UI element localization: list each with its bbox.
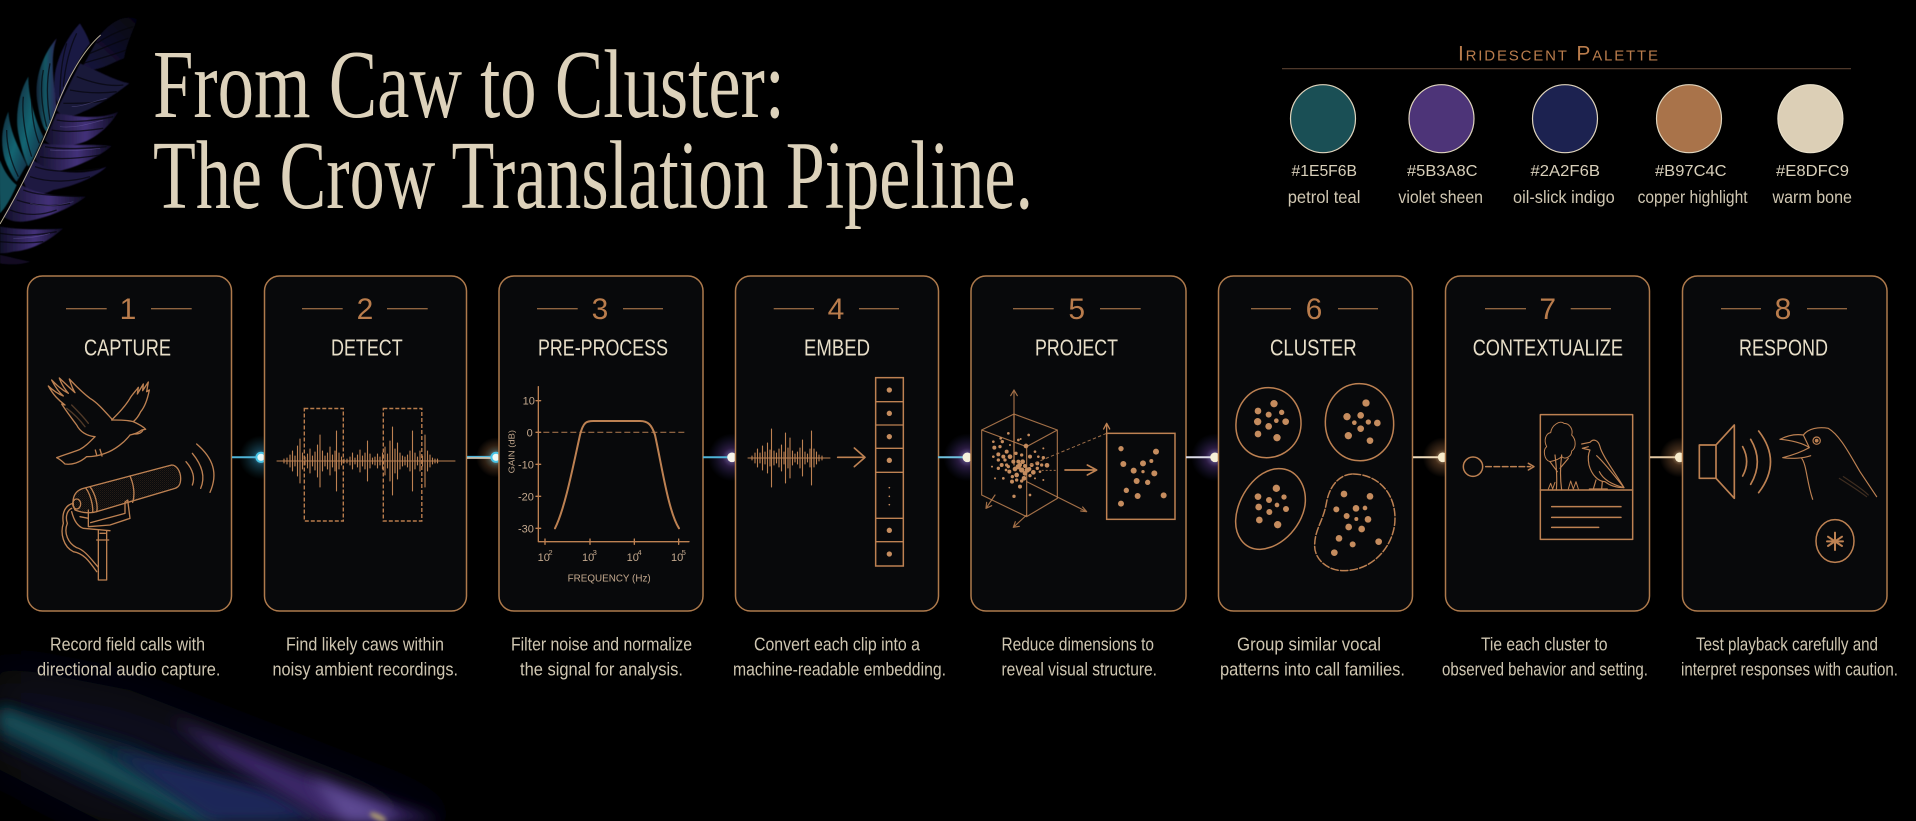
swatch: copper highlight: #B97C4C — [1655, 163, 1727, 180]
caption: capture: directional audio capture. — [37, 660, 220, 680]
arrow: connector 1 to 2 — [232, 435, 283, 479]
swatch: petrol teal: #1E5F6B — [1292, 163, 1357, 180]
swatch: violet sheen: #5B3A8C — [1407, 163, 1478, 180]
title: The Crow Translation Pipeline. — [153, 122, 1033, 230]
arrow: connector 6 to 7 — [1413, 437, 1463, 477]
axis labels — [507, 396, 686, 585]
swatch: warm bone — [1772, 85, 1852, 207]
caption: contextualize: Tie each cluster to — [1481, 635, 1608, 655]
caption: capture — [37, 635, 220, 680]
icon: flying crow — [48, 378, 149, 464]
swatch: violet sheen: violet sheen — [1398, 187, 1483, 207]
step number: 4 — [828, 293, 844, 326]
panel: step 4 embed — [736, 276, 938, 611]
title: From Caw to Cluster: — [153, 31, 785, 139]
swatch: copper highlight: copper highlight — [1638, 187, 1748, 207]
axis labels: 5 — [682, 548, 686, 557]
text block: step descriptions — [37, 635, 1898, 680]
step number: 3 — [592, 293, 608, 326]
caption: embed: machine-readable embedding. — [733, 660, 946, 680]
caption: cluster: Group similar vocal — [1237, 635, 1381, 655]
icon: calling crow — [1780, 428, 1877, 499]
icon: speaker playback — [1699, 425, 1770, 498]
icon: clip waveform — [748, 429, 830, 487]
arrow: connector 2 to 3 — [467, 437, 516, 477]
panel: step 8 respond — [1682, 276, 1887, 611]
caption: respond — [1681, 635, 1898, 680]
axis labels: -20 — [518, 491, 534, 503]
step heading: CONTEXTUALIZE — [1473, 335, 1623, 361]
swatch: petrol teal — [1288, 85, 1360, 207]
panel: step 1 capture — [28, 276, 232, 611]
panel: step 6 cluster — [1218, 276, 1412, 611]
step number: 5 — [1068, 293, 1085, 326]
swatch: oil-slick indigo — [1513, 85, 1615, 207]
step heading: CAPTURE — [84, 335, 171, 361]
caption: project: Reduce dimensions to — [1002, 635, 1154, 655]
icon: call-family clusters — [1236, 384, 1395, 571]
arrow: connector 4 to 5 — [938, 433, 991, 481]
swatch: oil-slick indigo: oil-slick indigo — [1513, 187, 1615, 207]
caption: cluster: patterns into call families. — [1220, 660, 1405, 680]
panel: step 7 contextualize — [1446, 276, 1650, 611]
axis labels: 10 — [627, 552, 639, 564]
axis labels: -30 — [518, 523, 534, 535]
step heading: CLUSTER — [1270, 335, 1357, 361]
icon: directional microphone — [62, 444, 214, 580]
caption: embed: Convert each clip into a — [754, 635, 921, 655]
step number: 6 — [1306, 293, 1322, 326]
panel: iridescent palette — [1282, 42, 1852, 207]
axis labels: 2 — [548, 548, 553, 557]
step heading: PRE-PROCESS — [538, 335, 668, 361]
caption: pre-process — [511, 635, 692, 680]
caption: respond: Test playback carefully and — [1696, 635, 1878, 655]
palette heading: Iridescent Palette — [1458, 42, 1658, 66]
axis labels: GAIN (dB) — [507, 430, 516, 473]
axis labels: -10 — [518, 459, 534, 471]
caption: project: reveal visual structure. — [1002, 660, 1157, 680]
step number: 2 — [357, 293, 373, 326]
step number: 1 — [120, 293, 136, 326]
panel: step 2 detect — [264, 276, 466, 611]
icon: 2D projection — [1065, 423, 1175, 519]
swatch: oil-slick indigo: #2A2F6B — [1530, 163, 1600, 180]
swatch: warm bone: warm bone — [1772, 187, 1852, 207]
axis labels: 0 — [527, 427, 533, 439]
caption: detect: Find likely caws within — [286, 635, 444, 655]
swatch: copper highlight — [1638, 85, 1748, 207]
caption: detect: noisy ambient recordings. — [272, 660, 458, 680]
title — [153, 31, 1033, 230]
step heading: PROJECT — [1035, 335, 1118, 361]
step number: 7 — [1539, 293, 1556, 326]
axis labels: 3 — [593, 548, 597, 557]
axis labels: 10 — [671, 552, 683, 564]
caption: cluster — [1220, 635, 1405, 680]
step heading: DETECT — [331, 335, 403, 361]
iridescent bottom streak — [0, 665, 470, 821]
caption: embed — [733, 635, 946, 680]
step number: 8 — [1775, 293, 1791, 326]
icon: waveform with detection boxes — [277, 408, 455, 521]
caption: contextualize — [1442, 635, 1648, 680]
panel: step 3 pre-process — [499, 276, 703, 611]
arrow: connector 5 to 6 — [1186, 433, 1239, 481]
panel: step 5 project — [971, 276, 1186, 611]
icon: iridescent feather — [0, 18, 137, 264]
arrow: connector 7 to 8 — [1650, 437, 1700, 477]
icon: caution badge — [1816, 520, 1854, 562]
caption: detect — [272, 635, 458, 680]
caption: project — [1002, 635, 1157, 680]
icon: embedding vector — [838, 378, 903, 566]
axis labels: 4 — [637, 548, 642, 557]
axis labels: FREQUENCY (Hz) — [568, 574, 651, 585]
icon: cluster linked to field note — [1463, 415, 1633, 539]
swatch: violet sheen — [1398, 85, 1483, 207]
caption: capture: Record field calls with — [50, 635, 205, 655]
icon: 3D point cloud — [982, 390, 1107, 527]
caption: pre-process: the signal for analysis. — [520, 660, 683, 680]
caption: contextualize: observed behavior and setting. — [1442, 660, 1648, 680]
axis labels: 10 — [523, 396, 535, 408]
arrow: connector 3 to 4 — [703, 433, 756, 481]
chart: band-pass gain curve — [507, 387, 689, 585]
caption: pre-process: Filter noise and normalize — [511, 635, 692, 655]
step heading: RESPOND — [1739, 335, 1828, 361]
axis labels: 10 — [538, 552, 550, 564]
axis labels: 10 — [582, 552, 594, 564]
step heading: EMBED — [804, 335, 870, 361]
swatch: warm bone: #E8DFC9 — [1776, 163, 1849, 180]
swatch: petrol teal: petrol teal — [1288, 187, 1360, 207]
